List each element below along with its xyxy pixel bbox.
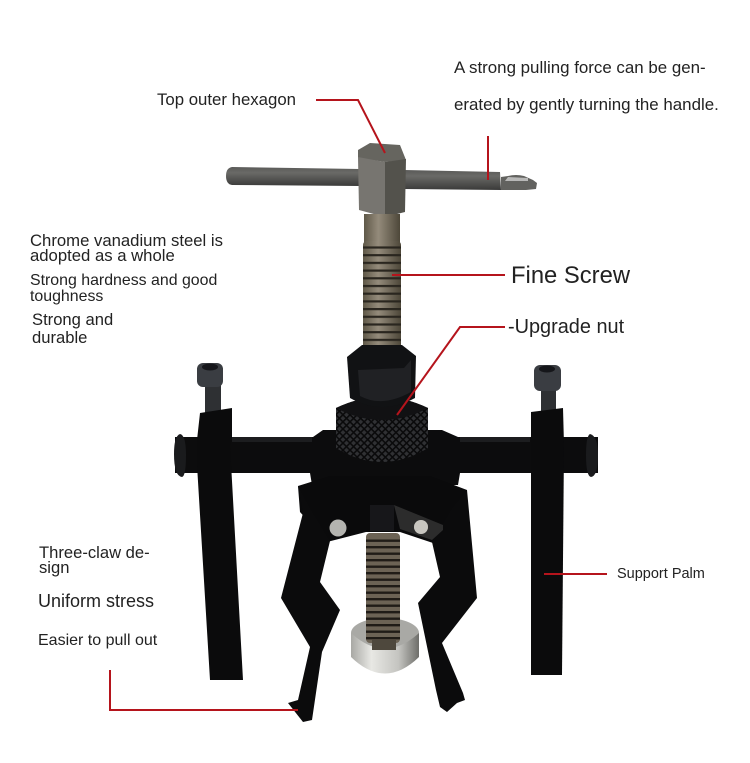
label: chrome vanadium steel: Chrome vanadium steel is xyxy=(30,231,223,250)
label: uniform stress: Uniform stress xyxy=(38,591,154,611)
label: strong and durable xyxy=(32,310,113,347)
line: handle xyxy=(487,136,489,180)
label: support palm: Support Palm xyxy=(617,566,705,582)
label: hardness xyxy=(30,272,217,305)
label: strong and durable: Strong and xyxy=(32,310,113,329)
tool: three-claw puller xyxy=(174,143,598,722)
upper screw xyxy=(363,214,401,363)
line: hexagon xyxy=(316,100,385,153)
line: upgrade nut xyxy=(397,327,505,415)
knurled ring and nut xyxy=(336,345,428,462)
left screw xyxy=(197,363,223,417)
outer hexagon head xyxy=(358,143,406,217)
left claw xyxy=(281,486,340,722)
line: claw xyxy=(110,670,298,710)
right screw xyxy=(534,365,561,420)
label: three-claw design: Three-claw de- xyxy=(39,543,150,562)
pins xyxy=(330,505,443,540)
label: strong and durable: durable xyxy=(32,328,87,347)
puck xyxy=(351,618,419,674)
label: hardness: toughness xyxy=(30,288,103,305)
lower screw xyxy=(351,533,419,674)
right support palm xyxy=(531,408,564,675)
line: fine screw xyxy=(392,274,505,276)
right claw xyxy=(418,490,477,712)
left support palm xyxy=(197,408,243,680)
label: fine screw: Fine Screw xyxy=(511,262,631,289)
label: pulling force: erated by gently turning the handle. xyxy=(454,95,719,114)
label: three-claw design xyxy=(39,543,150,577)
callout lines xyxy=(110,100,607,710)
label: chrome vanadium steel xyxy=(30,231,223,265)
line: support palm xyxy=(544,573,607,575)
label: pulling force: A strong pulling force can be gen- xyxy=(454,58,706,77)
T handle xyxy=(226,167,537,190)
label: top outer hexagon: Top outer hexagon xyxy=(157,90,296,109)
label: upgrade nut: -Upgrade nut xyxy=(508,316,625,338)
label: three-claw design: sign xyxy=(39,558,69,577)
label: easier to pull out: Easier to pull out xyxy=(38,632,158,649)
bracket xyxy=(298,476,467,543)
label: hardness: Strong hardness and good xyxy=(30,272,217,289)
crossbar xyxy=(174,430,598,485)
label: chrome vanadium steel: adopted as a whole xyxy=(30,246,175,265)
label: pulling force xyxy=(454,58,719,114)
